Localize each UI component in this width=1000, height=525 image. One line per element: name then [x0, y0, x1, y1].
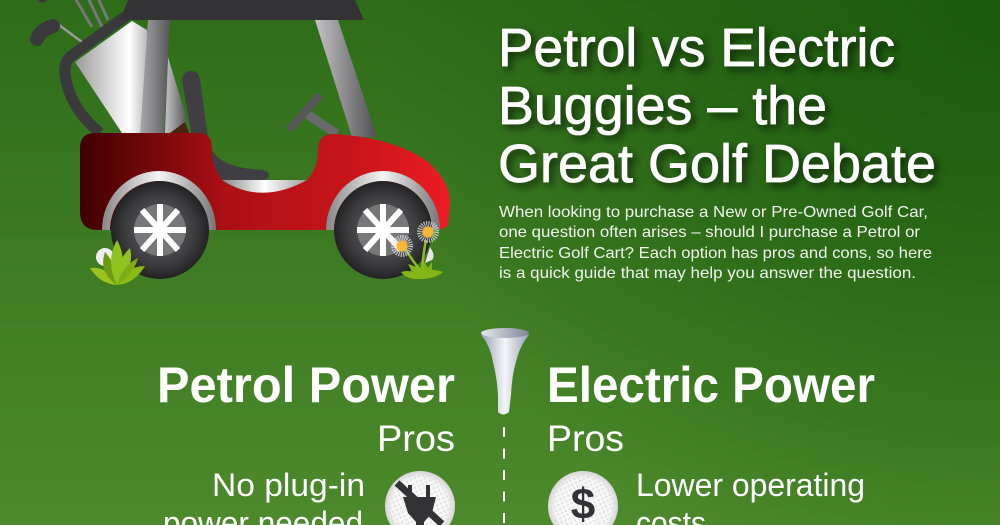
icon: crossed-out plug on golf ball	[385, 471, 455, 525]
text: no plug-in power needed: No plug-in	[212, 467, 365, 503]
title	[498, 18, 936, 194]
text: no plug-in power needed	[163, 467, 365, 525]
steering wheel	[289, 95, 337, 134]
rear wheel	[102, 171, 216, 279]
icon: dollar sign on golf ball	[548, 471, 618, 525]
heading: petrol power: Petrol Power	[157, 357, 455, 413]
seat	[182, 71, 269, 181]
subheading: electric pros: Pros	[547, 418, 624, 459]
heading: electric power: Electric Power	[547, 357, 875, 413]
intro paragraph	[499, 204, 932, 282]
golf bag	[65, 16, 189, 133]
canopy posts	[140, 20, 377, 137]
buggy body	[80, 133, 450, 230]
text: lower operating costs: Lower operating	[636, 467, 865, 503]
panel: electric power	[547, 357, 875, 525]
subheading: petrol pros: Pros	[377, 418, 455, 459]
golf tee divider	[481, 328, 529, 525]
text: lower operating costs	[636, 467, 865, 525]
intro paragraph: is a quick guide that may help you answer the question.	[499, 265, 916, 282]
golf clubs	[37, 0, 108, 42]
title: Petrol vs Electric	[498, 18, 895, 78]
floor	[222, 180, 308, 193]
title: Buggies – the	[498, 76, 827, 136]
intro paragraph: When looking to purchase a New or Pre-Owned Golf Car,	[499, 204, 928, 221]
panel: petrol power	[157, 357, 455, 525]
grass and ball	[90, 240, 145, 285]
intro paragraph: one question often arises – should I purchase a Petrol or	[499, 224, 921, 241]
roof	[120, 0, 364, 20]
illustration: golf buggy	[37, 0, 450, 285]
title: Great Golf Debate	[498, 134, 936, 194]
front wheel	[326, 171, 440, 279]
intro paragraph: Electric Golf Cart? Each option has pros and cons, so here	[499, 245, 932, 262]
flowers	[394, 224, 443, 279]
